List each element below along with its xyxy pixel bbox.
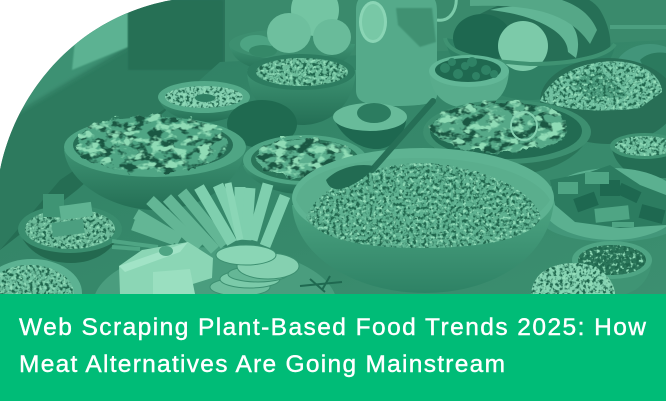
small nut bowl (610, 133, 666, 178)
jar of lemon water (356, 0, 456, 106)
serving board (96, 247, 334, 294)
plate of roasted cubes (540, 165, 666, 242)
chickpea bowl (247, 54, 356, 125)
round cheese (531, 263, 615, 294)
block of cheese (119, 242, 213, 294)
left dip bowl with croutons (18, 194, 122, 263)
large salad bowl (64, 115, 246, 210)
hummus dish bottom left (0, 259, 82, 294)
serving spoon (326, 101, 433, 189)
apple bowl (237, 0, 355, 66)
title banner (0, 294, 666, 401)
room background (0, 0, 666, 250)
small walnut bowl (572, 241, 652, 279)
middle salad bowl (243, 135, 367, 194)
title text: Meat Alternatives Are Going Mainstream (19, 351, 505, 378)
whole avocado (227, 100, 297, 148)
fruit basket (448, 0, 616, 71)
large grain salad bowl (292, 148, 554, 293)
blueberry bowl (429, 55, 509, 108)
rosemary sprig (300, 276, 342, 292)
table surface (0, 40, 666, 294)
title text (18, 314, 646, 378)
celery sticks (112, 183, 285, 250)
right salad bowl with onion rings (423, 100, 591, 175)
hummus bowl at the back (158, 81, 250, 122)
title text: Web Scraping Plant-Based Food Trends 2025: How (19, 314, 646, 341)
halved avocado (333, 103, 407, 149)
hero photo: plant-based food spread in green duotone (0, 0, 666, 294)
crusty bread loaves (540, 44, 666, 144)
stack of crackers (210, 245, 299, 296)
